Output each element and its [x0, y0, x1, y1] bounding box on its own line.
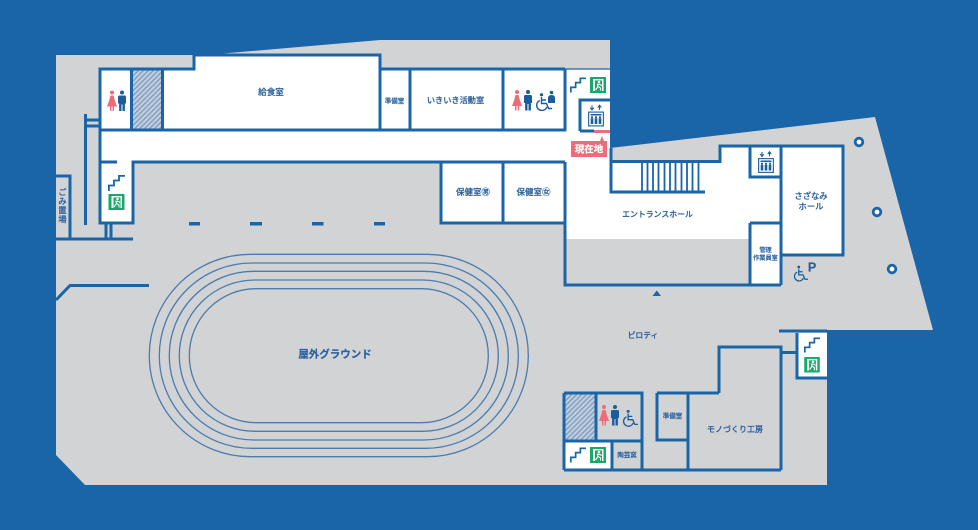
- building ground area: [56, 40, 933, 485]
- room labels: ピロティ: [628, 331, 658, 340]
- elevator icon north: [589, 105, 603, 126]
- hatched shafts: [133, 69, 596, 440]
- room labels: 作業員室: [753, 254, 778, 262]
- room labels: 陶芸窯: [617, 450, 637, 459]
- current location marker: 現在地: [575, 144, 604, 156]
- room labels: み: [58, 197, 67, 206]
- room labels: さざなみ: [794, 191, 828, 201]
- room labels: 置: [58, 206, 67, 215]
- accessible parking: P: [808, 260, 816, 274]
- room labels: 屋外グラウンド: [298, 348, 372, 360]
- room labels: エントランスホール: [622, 210, 693, 219]
- room labels: 場: [58, 214, 67, 224]
- stairs and exit: north: [571, 77, 606, 93]
- stairs and exit: west: [108, 176, 125, 210]
- entrance marker triangle: [652, 290, 661, 296]
- thin top wall over stairs: [565, 68, 610, 70]
- toilets north: [512, 90, 555, 110]
- room labels: 管理: [759, 246, 772, 254]
- entrance stair treads: [642, 162, 698, 192]
- current location marker: [571, 130, 610, 157]
- elevator icon east: [759, 152, 773, 172]
- room labels: [58, 86, 828, 459]
- gray floor inside entrance: [566, 239, 748, 284]
- room labels: 準備室: [385, 96, 405, 105]
- stairs and exit: east: [804, 338, 820, 372]
- room labels: ホール: [799, 202, 823, 212]
- room labels: いきいき活動室: [427, 95, 484, 105]
- stairs and exit: south: [571, 447, 606, 463]
- room labels: 保健室㊚: [456, 187, 490, 197]
- white interior rooms: [100, 55, 843, 470]
- toilets south: [599, 405, 638, 426]
- room labels: 保健室㊛: [516, 187, 551, 197]
- room labels: ご: [58, 187, 67, 197]
- outdoor running track: [149, 254, 528, 457]
- room labels: モノづくり工房: [707, 424, 763, 434]
- accessible parking: [795, 260, 816, 281]
- room labels: 給食室: [258, 86, 284, 97]
- toilets west: [107, 90, 126, 111]
- parking dashes: [189, 222, 385, 226]
- walls: [56, 55, 843, 470]
- columns: [855, 138, 896, 273]
- room labels: 準備室: [663, 411, 683, 420]
